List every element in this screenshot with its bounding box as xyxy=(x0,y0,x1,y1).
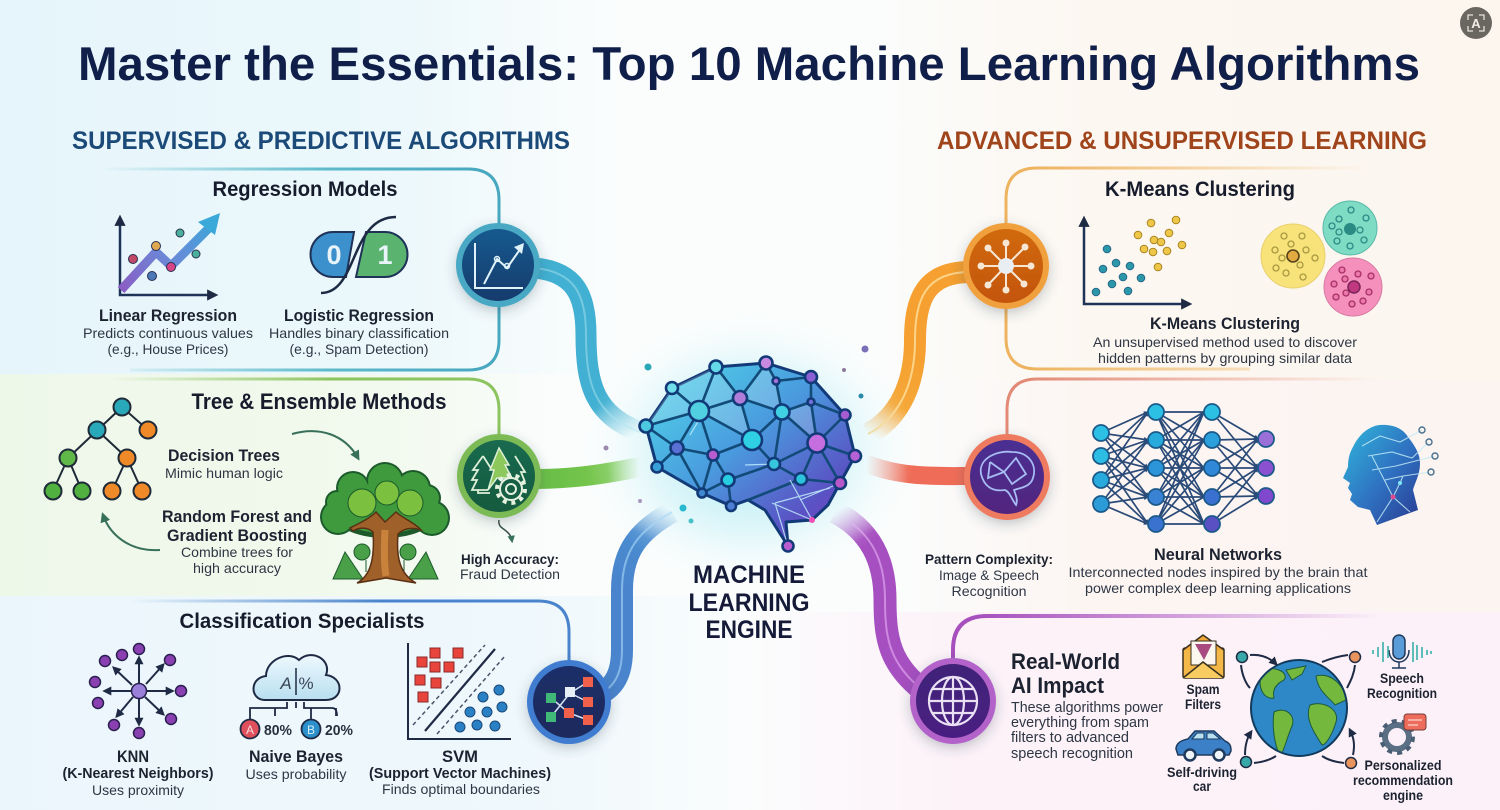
text: k-means description: An unsupervised method used to discover xyxy=(1093,334,1357,350)
text: personalized recommendation engine xyxy=(1353,757,1453,803)
icon: spam envelope xyxy=(1183,635,1224,678)
text: real-world impact: speech recognition xyxy=(1011,746,1133,762)
diagram: naive bayes: 80% xyxy=(264,722,292,739)
title: Master the Essentials: Top 10 Machine Learning Algorithms xyxy=(78,37,1420,90)
text: speech recognition: Recognition xyxy=(1367,685,1437,701)
panel: regression models xyxy=(83,178,449,357)
node: globe icon xyxy=(910,658,996,744)
node: brain icon xyxy=(964,434,1050,520)
text: random forest: high accuracy xyxy=(193,560,281,576)
icon: self-driving car xyxy=(1176,731,1231,760)
text: KNN: Uses proximity xyxy=(92,782,184,798)
arrow: node to fraud detection xyxy=(499,520,512,541)
text: pattern complexity: Image & Speech xyxy=(939,567,1039,583)
engine label: MACHINE xyxy=(693,561,805,589)
text: neural networks: Neural Networks xyxy=(1154,545,1282,564)
text: linear regression xyxy=(83,306,253,357)
panel: k-means clustering xyxy=(1084,178,1382,366)
text: linear regression: Predicts continuous values xyxy=(83,325,253,341)
text: neural networks: power complex deep learning applications xyxy=(1085,580,1351,596)
chart: neural network diagram xyxy=(1093,404,1274,532)
ribbons connecting nodes to the brain xyxy=(535,268,970,700)
text: logistic regression xyxy=(269,306,449,357)
diagram: naive bayes xyxy=(240,655,353,739)
panel: classification specialists: Classification Specialists xyxy=(180,610,424,633)
text: spam filters: Filters xyxy=(1185,696,1221,712)
text: spam filters: Spam xyxy=(1186,681,1220,697)
text: random forest xyxy=(162,507,312,576)
icon: AI head xyxy=(1343,425,1438,525)
icon: globe xyxy=(1251,660,1347,756)
text: self-driving car xyxy=(1167,764,1237,794)
node: clustering hub icon xyxy=(963,223,1049,309)
text: pattern complexity: Recognition xyxy=(952,583,1026,599)
text: real-world impact: everything from spam xyxy=(1011,715,1149,731)
text: k-means description xyxy=(1093,314,1357,366)
diagram: naive bayes: B xyxy=(307,723,315,737)
text: KNN: (K-Nearest Neighbors) xyxy=(62,765,214,782)
text: real-world impact: These algorithms power xyxy=(1011,700,1163,716)
text: pattern complexity: Pattern Complexity: xyxy=(925,551,1053,567)
text: naive bayes xyxy=(246,747,346,782)
text: SVM: SVM xyxy=(442,747,478,766)
icon: large tree xyxy=(320,462,450,583)
text: naive bayes: Naive Bayes xyxy=(249,747,343,766)
text: high accuracy xyxy=(460,551,560,582)
icon: microphone and sound waves xyxy=(1373,635,1431,668)
chart: linear regression xyxy=(120,213,220,295)
node: trees and gear icon xyxy=(457,434,541,518)
text: self-driving car: Self-driving xyxy=(1167,764,1237,780)
panel outlines xyxy=(100,168,1380,665)
text: logistic regression: (e.g., Spam Detection) xyxy=(290,341,428,357)
text: personalized recommendation engine: engine xyxy=(1383,787,1423,803)
panel: regression models: Regression Models xyxy=(212,178,398,201)
chart: SVM xyxy=(408,643,511,739)
diagram: colored clusters xyxy=(1261,201,1382,316)
diagram: naive bayes: % xyxy=(298,674,314,693)
text: SVM: (Support Vector Machines) xyxy=(369,765,551,782)
central brain network xyxy=(585,315,915,585)
text: speech recognition xyxy=(1367,670,1437,701)
text: logistic regression: Handles binary classification xyxy=(269,325,449,341)
diagram: naive bayes: A xyxy=(246,723,254,737)
text: naive bayes: Uses probability xyxy=(246,766,346,782)
panel: tree and ensemble methods: Tree & Ensemble Methods xyxy=(192,389,446,414)
text: high accuracy: High Accuracy: xyxy=(461,551,559,567)
text: k-means description: hidden patterns by grouping similar data xyxy=(1098,350,1352,366)
node: regression icon xyxy=(456,223,540,307)
icon: translate badge: A xyxy=(1471,16,1481,31)
text: high accuracy: Fraud Detection xyxy=(460,566,560,582)
text: pattern complexity xyxy=(925,551,1053,599)
heading: supervised and predictive algorithms: SUPERVISED & PREDICTIVE ALGORITHMS xyxy=(72,127,570,155)
chart: logistic regression: 1 xyxy=(377,240,393,270)
text: SVM: Finds optimal boundaries xyxy=(382,781,540,797)
arrow: trees to forest xyxy=(292,431,358,458)
chart: scatter plot xyxy=(1084,216,1189,304)
panel: real-world AI impact xyxy=(1011,635,1453,803)
text: KNN xyxy=(62,747,214,798)
text: decision trees xyxy=(165,446,283,481)
panel: classification specialists xyxy=(62,610,551,798)
text: linear regression: (e.g., House Prices) xyxy=(108,341,228,357)
diagram: naive bayes: 20% xyxy=(325,722,353,739)
text: spam filters xyxy=(1185,681,1221,712)
icon: translate badge xyxy=(1460,7,1492,39)
text: real-world impact xyxy=(1011,649,1163,762)
text: real-world impact: Real-World xyxy=(1011,649,1120,674)
text: linear regression: Linear Regression xyxy=(99,306,237,325)
text: random forest: Random Forest and xyxy=(162,507,312,526)
text: speech recognition: Speech xyxy=(1380,670,1424,686)
text: SVM xyxy=(369,747,551,797)
engine label: ENGINE xyxy=(706,616,792,644)
text: self-driving car: car xyxy=(1193,778,1211,794)
icon: gear with chat bubble xyxy=(1381,714,1426,753)
panel: k-means clustering: K-Means Clustering xyxy=(1105,178,1295,201)
text: k-means description: K-Means Clustering xyxy=(1150,314,1300,333)
text: neural networks xyxy=(1068,545,1368,596)
connector dots xyxy=(1236,652,1360,768)
chart: logistic regression: 0 xyxy=(326,240,342,270)
text: logistic regression: Logistic Regression xyxy=(284,306,434,325)
panel: tree and ensemble methods xyxy=(44,389,560,583)
text: decision trees: Mimic human logic xyxy=(165,465,283,481)
text: real-world impact: filters to advanced xyxy=(1011,730,1129,746)
arrow: forest back to trees xyxy=(103,515,160,550)
text: KNN: KNN xyxy=(117,747,149,766)
node: classification tree icon xyxy=(527,660,611,744)
diagram: naive bayes: A xyxy=(279,674,292,693)
text: random forest: Gradient Boosting xyxy=(167,526,307,545)
chart: logistic regression xyxy=(310,217,408,293)
text: real-world impact: AI Impact xyxy=(1011,673,1105,698)
text: decision trees: Decision Trees xyxy=(168,446,280,465)
arrows around the globe xyxy=(1241,655,1355,763)
engine label xyxy=(688,561,810,644)
heading: advanced and unsupervised learning: ADVANCED & UNSUPERVISED LEARNING xyxy=(937,127,1427,155)
engine label: LEARNING xyxy=(688,589,810,617)
text: personalized recommendation engine: recommendation xyxy=(1353,772,1453,788)
text: personalized recommendation engine: Personalized xyxy=(1364,757,1442,773)
panel: neural networks xyxy=(925,404,1438,599)
text: random forest: Combine trees for xyxy=(181,544,293,560)
diagram: KNN xyxy=(90,644,186,738)
diagram: decision tree xyxy=(44,398,156,500)
text: neural networks: Interconnected nodes inspired by the brain that xyxy=(1068,564,1368,580)
